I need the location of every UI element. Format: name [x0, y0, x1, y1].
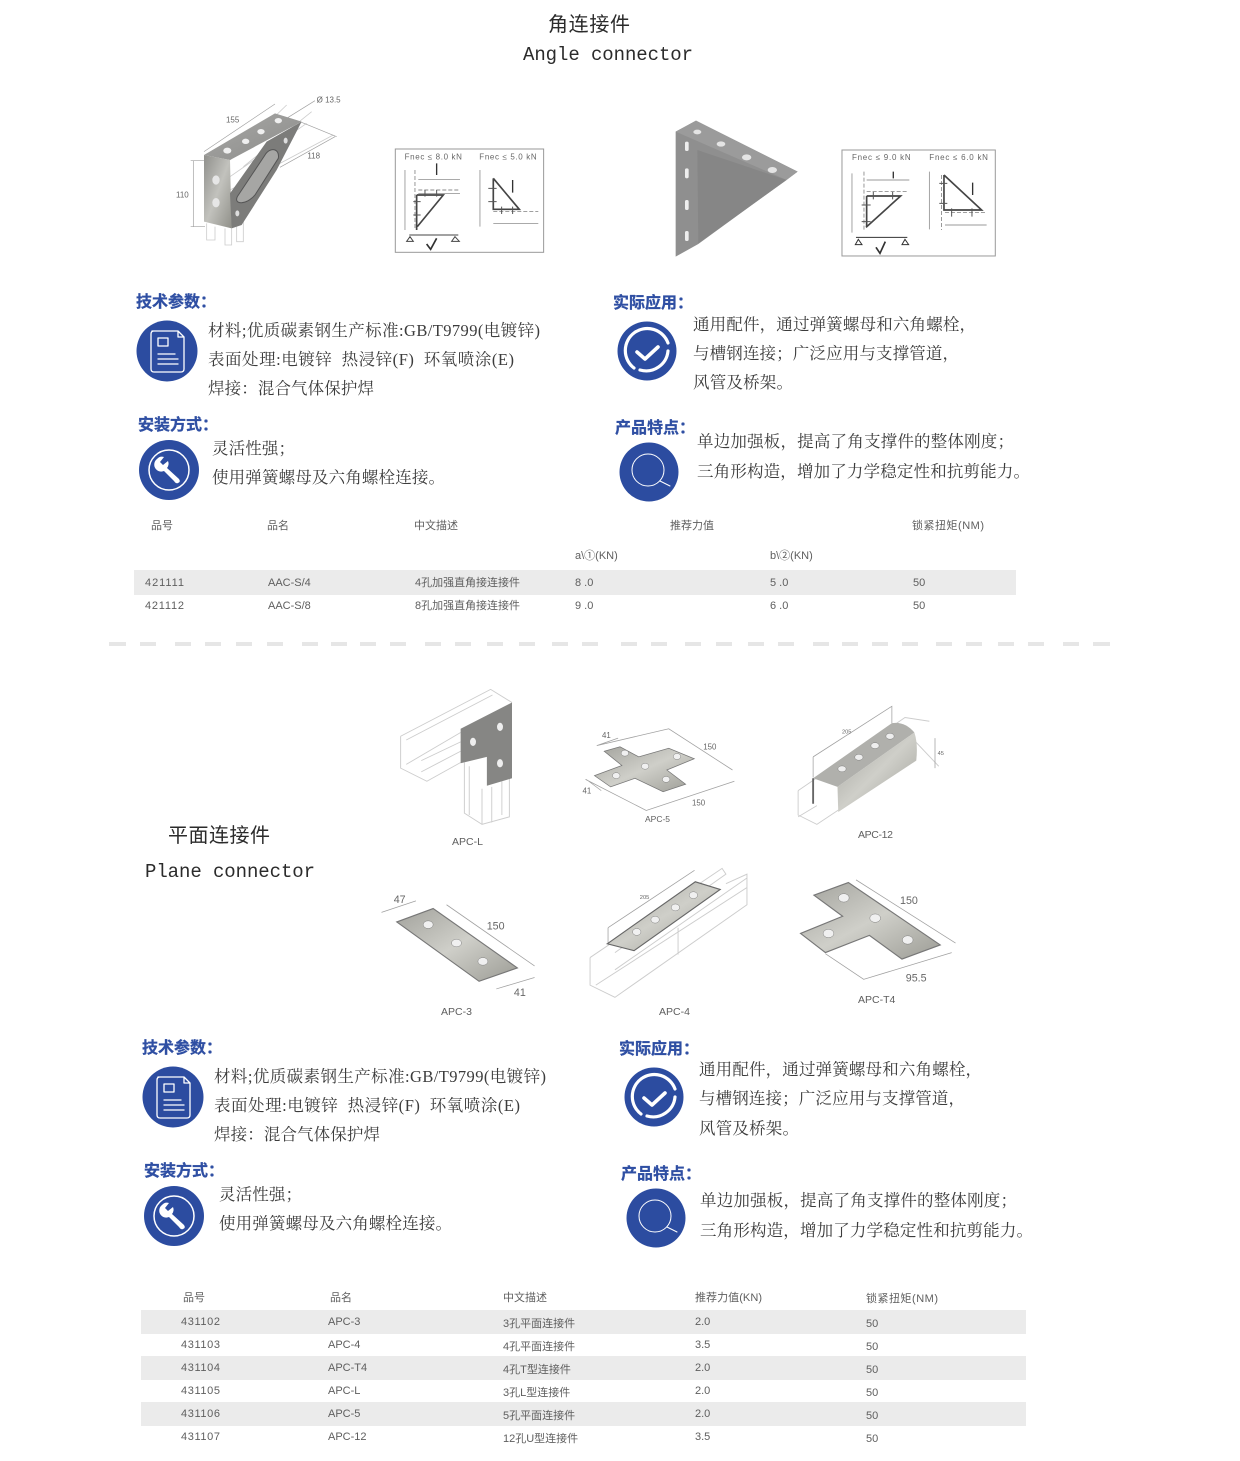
text: application — [699, 1060, 982, 1138]
load diagram: 8.0 and 5.0 kN: Fnec ≤ 5.0 kN — [479, 152, 537, 161]
load diagram: 9.0 and 6.0 kN: Fnec ≤ 9.0 kN — [852, 153, 911, 162]
text: installation: 灵活性强； — [219, 1185, 302, 1204]
table: angle connector specifications: AAC-S/8 — [268, 600, 311, 612]
table: angle connector specifications: 品号 — [151, 519, 173, 532]
label: APC-5: APC-5 — [645, 814, 670, 824]
image: APC-12: 45 — [938, 751, 944, 757]
table: plane connector specifications: 5孔平面连接件 — [503, 1409, 575, 1422]
image: APC-3 — [381, 894, 535, 999]
table: plane connector specifications: APC-4 — [328, 1339, 360, 1351]
table: plane connector specifications — [141, 1290, 1026, 1445]
table: plane connector specifications: 3.5 — [695, 1339, 710, 1351]
title: angle connector: 角连接件 — [548, 13, 630, 38]
image: APC-3: 41 — [514, 987, 526, 999]
image: APC-12 — [798, 706, 944, 824]
table: plane connector specifications: 2.0 — [695, 1316, 710, 1328]
title: plane connector: 平面连接件 — [168, 824, 270, 849]
table: angle connector specifications: 中文描述 — [414, 518, 458, 532]
table: angle connector specifications: b\②(KN) — [770, 549, 813, 562]
image: angle bracket with dimensions: Ø 13.5 — [317, 96, 341, 105]
text: parameters: 表面处理:电镀锌 热浸锌(F) 环氧喷涂(E) — [208, 350, 514, 369]
image: APC-T4: 150 — [900, 895, 918, 907]
table: plane connector specifications: APC-5 — [328, 1408, 360, 1420]
table: angle connector specifications: 4孔加强直角接连接件 — [415, 575, 520, 589]
table: angle connector specifications: 锁紧扭矩(NM) — [912, 518, 984, 532]
table: angle connector specifications: 品名 — [267, 518, 289, 532]
table: plane connector specifications: 50 — [866, 1433, 878, 1445]
panel: application 1 — [613, 293, 976, 392]
label: APC-T4: APC-T4 — [858, 994, 896, 1006]
text: features — [697, 432, 1030, 481]
text: parameters: 表面处理:电镀锌 热浸锌(F) 环氧喷涂(E) — [214, 1096, 520, 1115]
table: angle connector specifications: 推荐力值 — [670, 518, 714, 532]
image: APC-3: 150 — [487, 921, 505, 933]
text: application: 风管及桥架。 — [693, 373, 793, 392]
table: plane connector specifications: 431103 — [181, 1339, 220, 1351]
table: angle connector specifications: 6 .0 — [770, 600, 788, 612]
image: angle bracket with dimensions: 118 — [307, 151, 321, 160]
table: plane connector specifications: 12孔U型连接件 — [503, 1431, 578, 1445]
table: plane connector specifications: 431106 — [181, 1408, 220, 1420]
table: plane connector specifications: 4孔平面连接件 — [503, 1340, 575, 1353]
text: application: 与槽钢连接；广泛应用与支撑管道， — [693, 344, 959, 363]
image: APC-5: 41 — [582, 786, 591, 795]
title: angle connector — [523, 13, 693, 66]
table: plane connector specifications: 431105 — [181, 1385, 220, 1397]
table: angle connector specifications — [134, 518, 1016, 612]
text: installation — [219, 1185, 452, 1233]
image: angle bracket with dimensions: 110 — [176, 190, 189, 199]
label: APC-12: APC-12 — [858, 829, 893, 841]
text: parameters: 材料;优质碳素钢生产标准:GB/T9799(电镀锌) — [214, 1067, 546, 1086]
table: plane connector specifications: 中文描述 — [503, 1290, 547, 1304]
text: application: 通用配件，通过弹簧螺母和六角螺栓， — [693, 315, 976, 334]
icon: magnifier — [620, 442, 678, 502]
heading: technical parameters: 技术参数： — [136, 292, 216, 311]
load diagram: 8.0 and 5.0 kN — [395, 149, 544, 252]
text: features: 单边加强板，提高了角支撑件的整体刚度； — [697, 432, 1014, 451]
text: installation: 使用弹簧螺母及六角螺栓连接。 — [219, 1214, 452, 1233]
load diagram: 9.0 and 6.0 kN — [842, 150, 995, 256]
text: features: 三角形构造，增加了力学稳定性和抗剪能力。 — [697, 462, 1030, 481]
table: angle connector specifications: a\①(KN) — [575, 549, 618, 562]
image: APC-5: 150 — [692, 799, 706, 808]
table: plane connector specifications: 50 — [866, 1318, 878, 1330]
text: application — [693, 315, 976, 392]
title: plane connector: Plane connector — [145, 861, 315, 883]
image: APC-L — [401, 689, 512, 824]
image: APC-4 — [590, 868, 747, 997]
table: plane connector specifications: 2.0 — [695, 1408, 710, 1420]
image: angle bracket with dimensions: 155 — [226, 116, 240, 125]
text: parameters — [208, 321, 540, 398]
icon: wrench — [139, 440, 199, 500]
table: plane connector specifications: 3孔L型连接件 — [503, 1385, 570, 1399]
text: application: 通用配件，通过弹簧螺母和六角螺栓， — [699, 1060, 982, 1079]
image: APC-5: 41 — [602, 731, 611, 740]
label: APC-L: APC-L — [452, 836, 483, 848]
table: plane connector specifications: APC-12 — [328, 1431, 367, 1443]
text: features — [700, 1191, 1033, 1240]
image: APC-3: 47 — [394, 894, 406, 906]
image: APC-T4 — [801, 880, 956, 984]
text: parameters: 焊接：混合气体保护焊 — [214, 1125, 380, 1144]
table: plane connector specifications: 431102 — [181, 1316, 220, 1328]
table: plane connector specifications: 品号 — [183, 1291, 205, 1304]
table: plane connector specifications: APC-L — [328, 1385, 360, 1397]
text: features: 单边加强板，提高了角支撑件的整体刚度； — [700, 1191, 1017, 1210]
table: plane connector specifications: 2.0 — [695, 1385, 710, 1397]
panel: features 2 — [621, 1164, 1033, 1248]
text: installation: 灵活性强； — [212, 439, 295, 458]
heading: installation: 安装方式： — [138, 415, 218, 434]
table: plane connector specifications: APC-T4 — [328, 1362, 367, 1374]
table: plane connector specifications: APC-3 — [328, 1316, 360, 1328]
heading: application: 实际应用： — [619, 1039, 699, 1058]
label: APC-3: APC-3 — [441, 1006, 472, 1018]
table: plane connector specifications: 锁紧扭矩(NM) — [866, 1291, 938, 1305]
label: APC-4: APC-4 — [659, 1006, 690, 1018]
title: plane connector — [145, 824, 315, 883]
heading: installation: 安装方式： — [144, 1161, 224, 1180]
table: plane connector specifications: 50 — [866, 1341, 878, 1353]
panel: features 1 — [615, 418, 1030, 502]
icon: document — [142, 1066, 204, 1128]
image: APC-12: 205 — [842, 729, 851, 735]
text: installation — [212, 439, 445, 487]
table: plane connector specifications: 50 — [866, 1364, 878, 1376]
table: angle connector specifications: 421112 — [145, 600, 184, 612]
text: application: 风管及桥架。 — [699, 1119, 799, 1138]
table: plane connector specifications: 431104 — [181, 1362, 220, 1374]
image: APC-4: 205 — [640, 895, 649, 901]
heading: features: 产品特点： — [615, 418, 695, 437]
heading: features: 产品特点： — [621, 1164, 701, 1183]
table: angle connector specifications: 50 — [913, 577, 925, 589]
table: plane connector specifications: 3.5 — [695, 1431, 710, 1443]
panel: technical parameters 1 — [136, 292, 540, 398]
icon: wrench — [144, 1186, 204, 1246]
table: angle connector specifications: 50 — [913, 600, 925, 612]
load diagram: 9.0 and 6.0 kN: Fnec ≤ 6.0 kN — [929, 153, 988, 162]
text: parameters: 材料;优质碳素钢生产标准:GB/T9799(电镀锌) — [208, 321, 540, 340]
table: angle connector specifications: AAC-S/4 — [268, 577, 311, 589]
table: angle connector specifications: 8孔加强直角接连接件 — [415, 598, 520, 612]
table: angle connector specifications: 8 .0 — [575, 577, 593, 589]
image: APC-5: 150 — [703, 742, 717, 751]
text: features: 三角形构造，增加了力学稳定性和抗剪能力。 — [700, 1221, 1033, 1240]
table: plane connector specifications: 品名 — [330, 1290, 352, 1304]
table: angle connector specifications: 421111 — [145, 577, 184, 589]
table: angle connector specifications: 9 .0 — [575, 600, 593, 612]
table: plane connector specifications: 推荐力值(KN) — [695, 1290, 762, 1304]
table: plane connector specifications: 50 — [866, 1387, 878, 1399]
heading: application: 实际应用： — [613, 293, 693, 312]
panel: installation 2 — [144, 1161, 452, 1246]
panel: installation 1 — [138, 415, 445, 500]
table: plane connector specifications: 431107 — [181, 1431, 220, 1443]
title: angle connector: Angle connector — [523, 44, 693, 66]
icon: check — [624, 1068, 684, 1126]
load diagram: 8.0 and 5.0 kN: Fnec ≤ 8.0 kN — [405, 152, 462, 161]
panel: technical parameters 2 — [142, 1038, 546, 1144]
image: APC-5 — [582, 729, 734, 810]
table: plane connector specifications: 2.0 — [695, 1362, 710, 1374]
image: triangular gusset bracket — [676, 121, 798, 257]
table: angle connector specifications: 5 .0 — [770, 577, 788, 589]
icon: check — [618, 322, 676, 380]
panel: application 2 — [619, 1039, 982, 1138]
icon: magnifier — [626, 1188, 686, 1248]
icon: document — [136, 320, 198, 382]
image: APC-T4: 95.5 — [906, 972, 927, 984]
text: parameters: 焊接：混合气体保护焊 — [208, 379, 374, 398]
text: application: 与槽钢连接；广泛应用与支撑管道， — [699, 1089, 965, 1108]
text: parameters — [214, 1067, 546, 1144]
table: plane connector specifications: 4孔T型连接件 — [503, 1362, 571, 1376]
table: plane connector specifications: 50 — [866, 1410, 878, 1422]
text: installation: 使用弹簧螺母及六角螺栓连接。 — [212, 468, 445, 487]
table: plane connector specifications: 3孔平面连接件 — [503, 1317, 575, 1330]
image: angle bracket with dimensions — [176, 96, 341, 245]
heading: technical parameters: 技术参数： — [142, 1038, 222, 1057]
